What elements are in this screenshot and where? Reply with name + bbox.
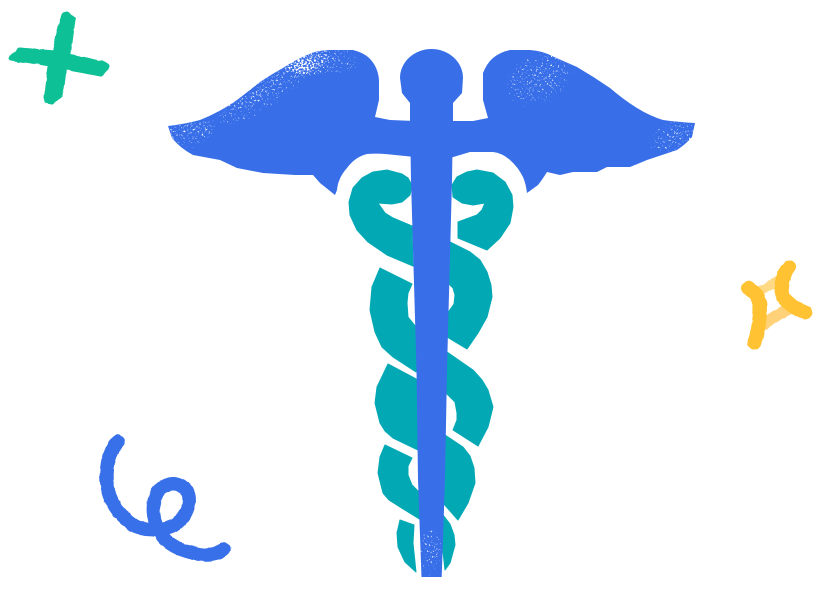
snake segment: top left head — [349, 170, 413, 266]
snake segment: second left — [370, 268, 416, 372]
snake segment: fourth left — [378, 445, 421, 520]
icon: yellow sparkle doodle — [748, 267, 805, 343]
staff knob — [400, 49, 463, 125]
icon: green plus doodle — [11, 14, 107, 102]
staff — [410, 120, 453, 577]
illustration: caduceus — [149, 24, 720, 584]
snake segment: third right — [446, 352, 493, 446]
left wing — [168, 50, 415, 195]
wings and staff — [168, 49, 695, 577]
snake segment: bottom left tail — [397, 520, 416, 572]
snake segment: fourth right — [443, 435, 475, 520]
right wing — [450, 50, 695, 193]
snake segment: second right — [447, 242, 492, 349]
snakes — [349, 170, 513, 572]
snake segment: top right head — [452, 170, 513, 250]
snake segment: third left — [375, 364, 418, 450]
snake segment: bottom right tail — [442, 515, 455, 570]
icon: blue swirl doodle — [106, 441, 224, 555]
texture speckles — [149, 24, 720, 584]
